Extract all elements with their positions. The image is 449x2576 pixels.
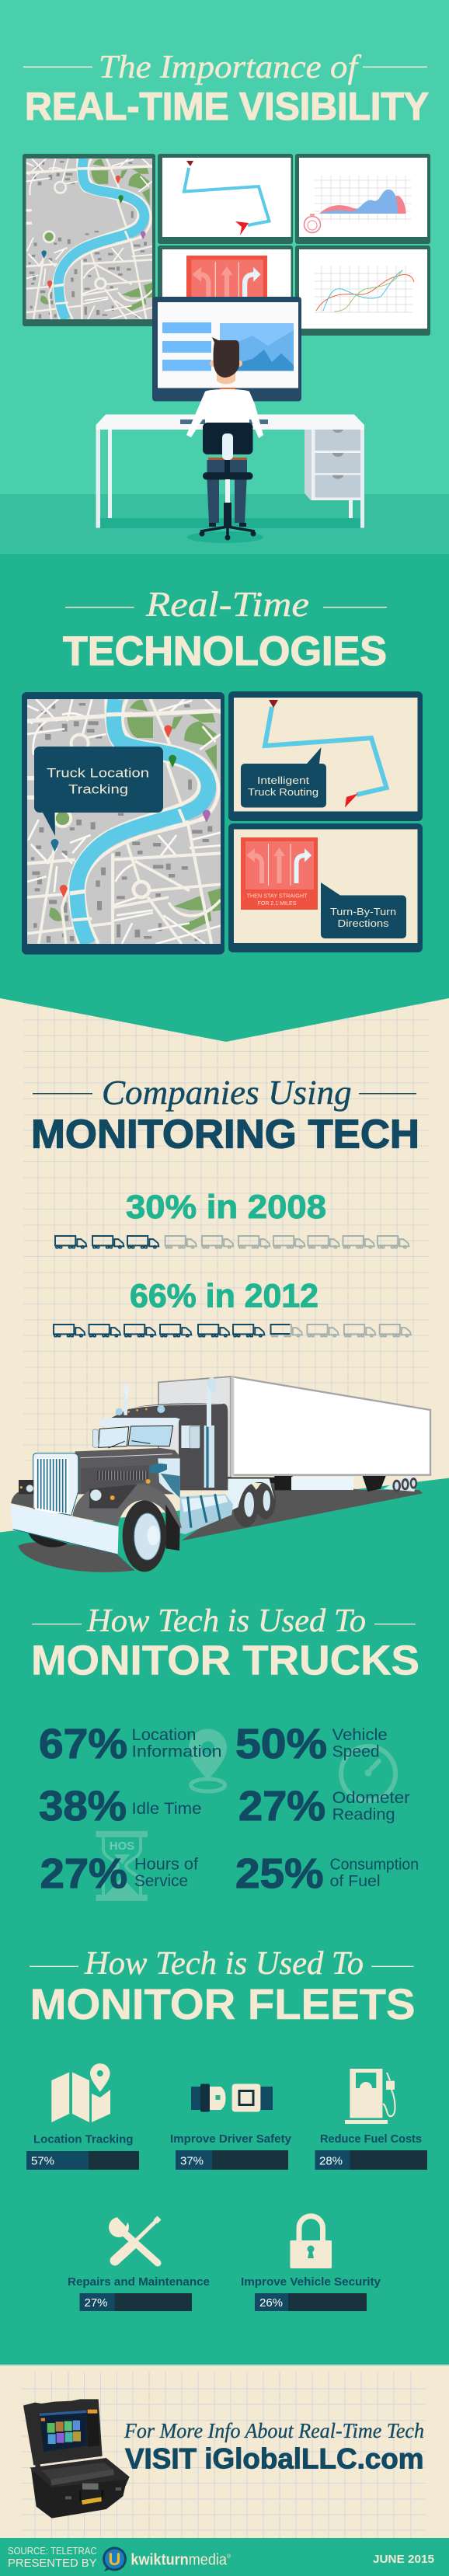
call to action: visit igloballlc.com: For More Info About Real-Time Tech <box>124 2419 424 2442</box>
fleet item: reduce fuel costs <box>315 2069 427 2170</box>
fleet item: improve vehicle security <box>241 2216 381 2311</box>
road sign: FOR 2.1 MILES <box>258 900 297 907</box>
grille <box>33 1453 78 1516</box>
icon: seat belt buckle <box>191 2083 273 2111</box>
stat: 27% hours of service: 27% <box>40 1850 127 1897</box>
source and presenter credit: SOURCE: TELETRAC <box>8 2545 97 2557</box>
fleet item: location tracking: Location Tracking <box>33 2133 133 2146</box>
progress bar 27%: 27% <box>84 2296 108 2310</box>
title: how tech is used to monitor fleets <box>30 1946 415 2028</box>
stat: 38% idle time <box>39 1783 202 1829</box>
desk <box>96 415 364 528</box>
stat: 27% odometer reading: Odometer <box>332 1789 410 1807</box>
watermark icon: hours of service hourglass: HOS <box>110 1840 134 1853</box>
control room illustration <box>23 154 430 543</box>
truck pictogram row 2012 <box>54 1325 411 1337</box>
title: real-time technologies: TECHNOLOGIES <box>63 628 387 674</box>
title: real-time technologies: Real-Time <box>145 584 309 624</box>
progress bar 28%: 28% <box>319 2154 343 2167</box>
call to action: visit igloballlc.com <box>124 2419 424 2475</box>
stat: 27% odometer reading <box>238 1783 410 1829</box>
trailer <box>158 1377 430 1492</box>
icon: padlock <box>290 2216 332 2268</box>
title: companies using monitoring tech: Companies Using <box>102 1074 352 1112</box>
rugged case device illustration <box>23 2399 130 2519</box>
stat: 67% location information <box>39 1721 222 1767</box>
callout: truck location tracking: Truck Location <box>47 766 149 780</box>
stat: 50% vehicle speed <box>235 1721 388 1767</box>
fleet item: reduce fuel costs: Reduce Fuel Costs <box>320 2132 422 2146</box>
callout: intelligent truck routing: Intelligent <box>257 775 309 786</box>
title: how tech is used to monitor fleets: How Tech is Used To <box>84 1946 364 1982</box>
progress bar 57%: 57% <box>31 2154 54 2167</box>
wall monitor: turn sign <box>158 245 293 336</box>
fleet item: repairs and maintenance <box>68 2213 210 2311</box>
progress bar 27% <box>79 2293 192 2311</box>
stat: 27% hours of service: Hours of <box>134 1856 198 1874</box>
title: real-time technologies <box>63 584 387 674</box>
stat: 25% consumption of fuel <box>235 1850 419 1897</box>
date: JUNE 2015 <box>373 2553 434 2566</box>
title: how tech is used to monitor fleets: MONITOR FLEETS <box>30 1979 415 2028</box>
stat: 50% vehicle speed: Vehicle <box>332 1726 388 1744</box>
title: the importance of real-time visibility: The Importance of <box>99 50 362 85</box>
logo: kwikturn media: U <box>109 2550 120 2569</box>
progress bar 26% <box>255 2293 367 2311</box>
progress bar 28% <box>315 2150 427 2170</box>
stat: 25% consumption of fuel: of Fuel <box>330 1873 381 1890</box>
cab and sleeper <box>92 1403 228 1490</box>
wall monitor: route <box>158 154 293 244</box>
stat: 50% vehicle speed: Speed <box>332 1743 380 1761</box>
wall monitor: city map <box>23 154 155 326</box>
title: companies using monitoring tech <box>31 1074 419 1157</box>
stat: 66% in 2012: 66% in 2012 <box>130 1277 318 1314</box>
exhaust stack <box>124 1377 217 1488</box>
logo: kwikturn media: kwikturnmedia <box>131 2552 228 2569</box>
fleet item: improve vehicle security: Improve Vehicle Security <box>241 2275 381 2289</box>
hood <box>75 1448 180 1494</box>
callout: turn-by-turn directions <box>321 882 406 938</box>
air filter <box>146 1458 180 1498</box>
icon: wrench and screwdriver <box>109 2213 159 2263</box>
progress bar 26%: 26% <box>259 2296 283 2310</box>
stat: 25% consumption of fuel: 25% <box>235 1850 323 1897</box>
title: how tech is used to monitor trucks: How Tech is Used To <box>86 1603 366 1639</box>
stat: 27% hours of service: Service <box>134 1872 188 1890</box>
stat: 25% consumption of fuel: Consumption <box>330 1857 419 1874</box>
shadows <box>18 1478 423 1572</box>
source and presenter credit <box>8 2545 97 2570</box>
front wheel <box>123 1500 180 1572</box>
fleet item: improve driver safety <box>170 2083 292 2170</box>
stat: 38% idle time: 38% <box>39 1783 127 1829</box>
stats grid: monitoring trucks <box>39 1721 419 1897</box>
stat: 27% odometer reading: Reading <box>332 1806 395 1824</box>
stat: 27% odometer reading: 27% <box>238 1783 325 1829</box>
callout: turn-by-turn directions: Turn-By-Turn <box>330 906 396 917</box>
center monitor <box>152 297 301 401</box>
panel: intelligent truck routing <box>228 691 423 821</box>
panel: truck location tracking map <box>22 692 224 955</box>
road sign: THEN STAY STRAIGHT <box>247 892 308 900</box>
fleet item: improve driver safety: Improve Driver Safety <box>170 2132 292 2146</box>
watermark icon: speedometer <box>341 1746 395 1801</box>
stat: 30% in 2008: 30% in 2008 <box>126 1189 326 1226</box>
stat: 67% location information: Location <box>132 1726 196 1744</box>
logo: kwikturn media: ® <box>227 2553 231 2560</box>
title: companies using monitoring tech: MONITORING TECH <box>31 1112 419 1157</box>
callout: turn-by-turn directions: Directions <box>337 917 389 929</box>
operator at desk <box>180 337 268 543</box>
wall monitor: line chart <box>295 245 430 336</box>
callout: truck location tracking <box>34 747 163 836</box>
call to action: visit igloballlc.com: VISIT iGlobalLLC.com <box>125 2443 424 2475</box>
stat: 50% vehicle speed: 50% <box>235 1721 327 1767</box>
icon: folded map with pin <box>51 2063 110 2122</box>
source and presenter credit: PRESENTED BY <box>8 2557 97 2570</box>
stat: 27% hours of service <box>40 1850 198 1897</box>
truck pictogram row 2008 <box>55 1236 409 1248</box>
callout: intelligent truck routing: Truck Routing <box>248 786 318 798</box>
progress bar 57% <box>26 2151 139 2170</box>
title: how tech is used to monitor trucks: MONITOR TRUCKS <box>31 1638 419 1684</box>
road sign <box>241 837 318 910</box>
logo: kwikturn media <box>103 2546 231 2571</box>
title: the importance of real-time visibility <box>23 50 429 128</box>
bumper <box>10 1505 119 1554</box>
panel: turn-by-turn directions <box>228 823 423 952</box>
stat: 67% location information: Information <box>132 1743 222 1761</box>
stat: 38% idle time: Idle Time <box>132 1800 202 1818</box>
stat: 67% location information: 67% <box>39 1721 127 1767</box>
title: the importance of real-time visibility: REAL-TIME VISIBILITY <box>25 85 429 128</box>
watermark icon: hours of service hourglass <box>96 1831 148 1901</box>
callout: intelligent truck routing <box>241 747 326 808</box>
fuel tank <box>180 1494 233 1534</box>
title: how tech is used to monitor trucks <box>31 1603 419 1684</box>
icon: fuel pump <box>345 2069 395 2124</box>
watermark icon: location pin <box>189 1729 227 1791</box>
callout: truck location tracking: Tracking <box>68 782 128 797</box>
wall monitor: area chart <box>295 154 430 244</box>
footer <box>0 2538 449 2576</box>
headlights and body <box>11 1480 182 1528</box>
progress bar 37% <box>176 2150 288 2170</box>
floor rug <box>100 518 360 528</box>
rear wheels <box>223 1478 277 1527</box>
fleet item: repairs and maintenance: Repairs and Maintenance <box>68 2275 210 2289</box>
truck illustration <box>10 1377 430 1572</box>
fleet item: location tracking <box>26 2063 139 2170</box>
progress bar 37%: 37% <box>180 2154 204 2167</box>
